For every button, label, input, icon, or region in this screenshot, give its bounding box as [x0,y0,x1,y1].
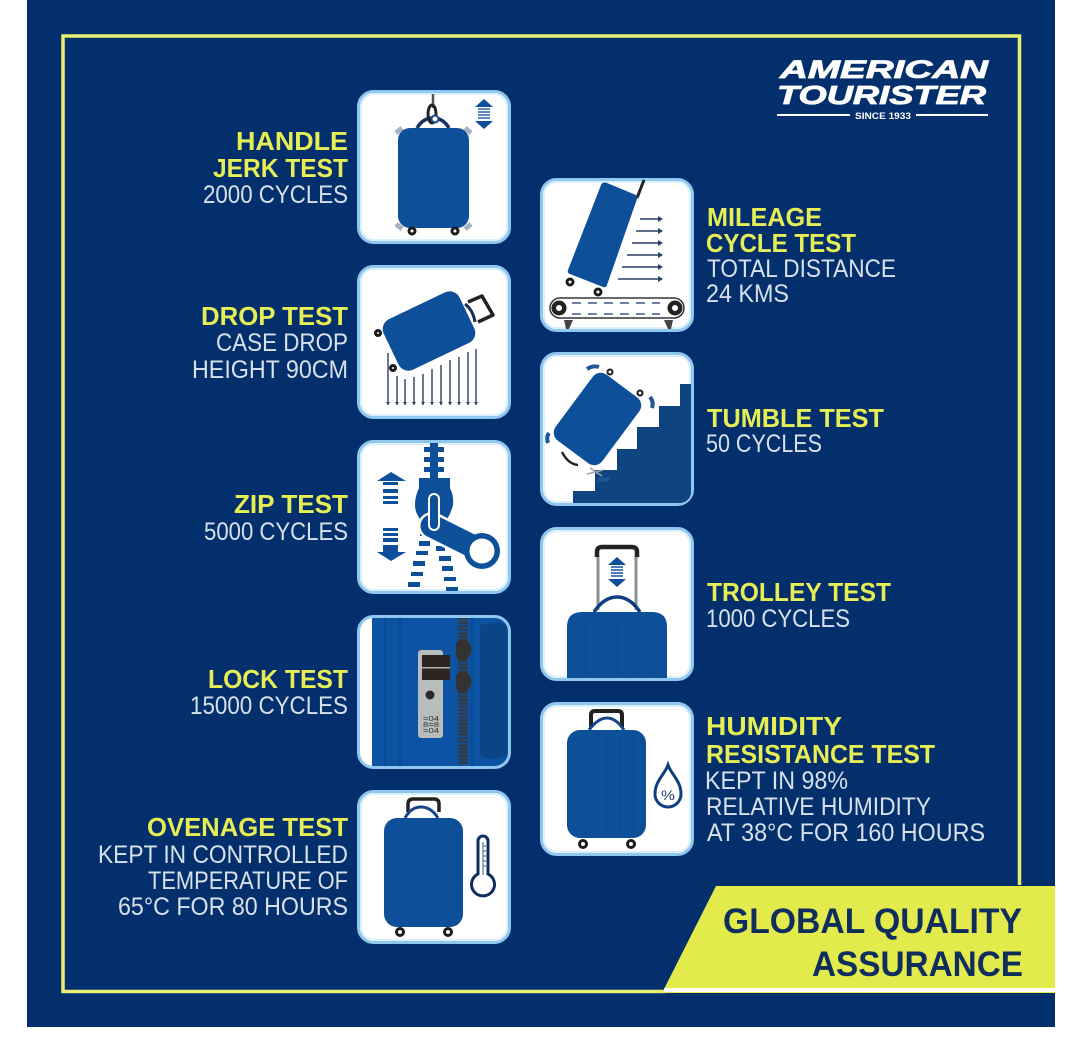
badge: global quality assurance [662,886,1055,993]
label: handle jerk test [203,126,348,209]
label: lock test [190,664,348,720]
badge: global quality assurance: ASSURANCE [812,945,1023,984]
label: lock test: 15000 CYCLES [190,692,348,720]
brand logo: AMERICAN [778,56,989,84]
label: humidity resistance test: RELATIVE HUMIDITY [706,793,931,821]
label: ovenage test: KEPT IN CONTROLLED [98,841,348,869]
panel: drop test [358,266,510,418]
panel: trolley test [542,528,692,680]
label: ovenage test: OVENAGE TEST [147,812,348,842]
label: humidity resistance test [705,711,985,847]
panel: tumble test [542,354,692,504]
label: tumble test: TUMBLE TEST [707,403,884,433]
label: humidity resistance test: AT 38°C FOR 160 HOURS [707,819,985,847]
panel: handle jerk test [358,92,510,242]
panel: humidity resistance test: % [661,787,675,803]
label: mileage cycle test [706,202,896,308]
brand logo: SINCE 1933 [855,111,911,122]
label: drop test: CASE DROP [216,329,348,357]
panel: humidity resistance test [542,704,692,854]
label: trolley test [706,577,891,633]
panel: mileage cycle test [542,180,692,330]
label: trolley test: TROLLEY TEST [707,577,891,607]
label: ovenage test: 65°C FOR 80 HOURS [118,893,348,921]
panel: lock test: =04 [423,728,439,735]
panel: zip test [358,442,510,592]
label: mileage cycle test: TOTAL DISTANCE [707,255,896,283]
label: ovenage test: TEMPERATURE OF [148,867,348,895]
label: drop test: DROP TEST [201,301,348,331]
panel: lock test: =04 [423,716,439,723]
label: drop test: HEIGHT 90CM [192,356,348,384]
label: zip test: 5000 CYCLES [204,518,348,546]
label: mileage cycle test: CYCLE TEST [706,228,856,258]
label: handle jerk test: HANDLE [236,126,348,156]
brand logo: TOURISTER [777,80,986,110]
label: humidity resistance test: RESISTANCE TEST [706,739,935,769]
badge: global quality assurance: GLOBAL QUALITY [723,902,1022,941]
label: humidity resistance test: HUMIDITY [706,711,842,741]
label: tumble test: 50 CYCLES [706,430,822,458]
brand logo [777,56,989,122]
label: ovenage test [98,812,348,921]
label: mileage cycle test: MILEAGE [707,202,822,232]
panel: lock test [358,616,510,768]
panel: lock test: 8=8 [423,722,439,729]
label: drop test [192,301,348,384]
panel: ovenage test [358,792,510,942]
label: mileage cycle test: 24 KMS [706,280,789,308]
label: zip test: ZIP TEST [234,489,348,519]
label: trolley test: 1000 CYCLES [706,605,850,633]
label: handle jerk test: 2000 CYCLES [203,181,348,209]
label: humidity resistance test: KEPT IN 98% [705,767,848,795]
label: handle jerk test: JERK TEST [213,153,348,183]
label: zip test [204,489,348,546]
label: tumble test [706,403,884,458]
label: lock test: LOCK TEST [208,664,348,694]
